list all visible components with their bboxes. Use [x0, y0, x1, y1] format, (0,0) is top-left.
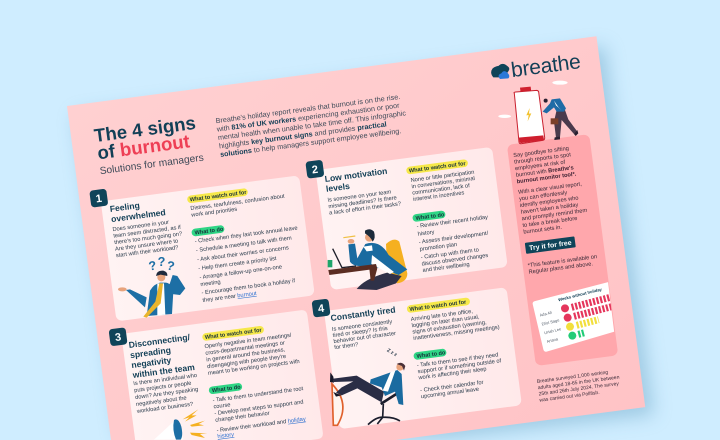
sidebar text: Say goodbye to sifting [513, 146, 569, 159]
question text 3: puts projects or people [134, 381, 192, 394]
question text 1: start with their workload? [116, 245, 179, 259]
chart card [533, 281, 620, 352]
sidebar text: to take a break before [522, 216, 578, 229]
actions 4: - Check their calendar for [420, 380, 484, 394]
actions 2: promotion plan [419, 242, 457, 253]
question text 2: a lack of effort in their tasks? [329, 201, 401, 217]
watch text 1: Distress, tearfulness, confusion about [190, 194, 285, 212]
intro text: Breathe's holiday report reveals that burnout is on the rise. [215, 92, 401, 125]
jacket [370, 370, 403, 405]
pill watch 1: What to watch out for [189, 190, 248, 203]
sidebar text: burnout monitor tool*. [516, 171, 577, 185]
badge 3 [109, 327, 128, 346]
title: Solutions for managers [99, 153, 204, 177]
watch text 3: meant to be working on projects with [208, 359, 300, 377]
watch text 2: interest in incentives [413, 190, 465, 203]
sidebar text: burnout sets in. [523, 225, 563, 236]
actions 3: - Review their workload and holiday [216, 417, 306, 434]
shoes [330, 372, 341, 397]
question text 1: team seem distracted, as if [113, 225, 182, 240]
chair base [368, 404, 400, 425]
question text 2: Is someone on your team [327, 189, 392, 204]
chair [386, 240, 407, 283]
row labels: Uriah Lee [544, 326, 562, 335]
watch text 1: work and priorities [190, 207, 238, 219]
sidebar text: through reports to spot [514, 152, 572, 166]
heading 1: Feeling [109, 200, 140, 214]
actions 1: - Ask about their worries or concerns [197, 245, 289, 263]
actions 2: and their wellbeing [422, 262, 470, 274]
heading 2: levels [325, 181, 351, 194]
chart: weeks without holiday [533, 281, 620, 352]
plant [328, 260, 332, 267]
question text 4: for them? [334, 342, 359, 351]
intro text: with 81% of UK workers experiencing exhaustion or poor [216, 101, 400, 134]
illustration: overwhelmed man [118, 255, 185, 318]
shirt [383, 371, 395, 392]
watch text 4: logging on later than usual, [411, 314, 480, 329]
watch text 4: signs of exhaustion (yawning, [412, 320, 487, 336]
illustration: sleeping man [330, 348, 405, 425]
heading 1: overwhelmed [111, 207, 166, 224]
head [157, 273, 165, 281]
intro text: highlights key burnout signs and provides practical [218, 119, 387, 150]
panel: card 3 disconnecting [109, 304, 324, 440]
shoes [554, 130, 578, 140]
question text 1: Are they unsure where to [115, 238, 179, 253]
panel: card 2 low motivation [305, 137, 508, 291]
pill do 3: What to do [212, 384, 242, 394]
heading 3: within the team [131, 362, 196, 380]
watch text 2: communication, lack of [412, 183, 471, 197]
intro text: solutions to help managers support employee wellbeing. [220, 126, 402, 159]
button: try it for free: Try it for free [529, 240, 572, 252]
zzz: Z z z [386, 348, 398, 358]
trousers [333, 376, 384, 402]
actions 2: - Review their recent holiday [416, 215, 488, 230]
briefcase [551, 118, 558, 124]
heading 4: Constantly tired [330, 305, 396, 323]
heading 3: Disconnecting/ [128, 332, 191, 350]
pill watch 2: What to watch out for [409, 161, 467, 174]
pencil [343, 236, 355, 238]
question text 4: tired or sleepy? Is this [332, 326, 388, 339]
actions 3: change their behavior [215, 411, 270, 424]
watch text 3: Openly negative in team meetings/ [204, 333, 292, 350]
head [396, 363, 404, 371]
laptop [333, 249, 356, 268]
badge 3: 3 [114, 331, 122, 344]
actions 1: they are near burnout [202, 291, 257, 304]
man legs [554, 110, 577, 137]
actions 2: history [417, 230, 435, 238]
sidebar text: With a clear visual report, [518, 181, 583, 196]
left hand [118, 287, 127, 291]
chair seat [381, 391, 402, 404]
legs [357, 273, 402, 290]
jacket [348, 243, 407, 275]
heading 3: spreading [129, 345, 171, 360]
badge 4: 4 [317, 303, 326, 315]
intro text: mental health when unable to take time off. This infographic [217, 108, 407, 142]
row 3 [566, 320, 599, 331]
illustration: man at desk [328, 229, 407, 290]
title: The 4 signs [93, 112, 197, 146]
battery cap [520, 87, 531, 93]
actions 2: discuss observed changes [421, 253, 489, 268]
pill do 3 [208, 383, 243, 395]
actions 4: - Talk to them to see if they need [417, 352, 499, 369]
actions 3: course [213, 402, 231, 410]
watch text 3: disengaging with people they're [207, 354, 287, 370]
actions 1: - Arrange a follow-up one-on-one [199, 264, 282, 281]
head [544, 99, 548, 103]
jacket [126, 275, 185, 316]
jacket [543, 98, 566, 113]
page: pink infographic sheet [67, 36, 645, 440]
actions 4: work is affecting their sleep [417, 367, 487, 382]
watch text 2: None or little participation [410, 170, 475, 184]
question marks: ? [165, 259, 176, 274]
icon: logo cloud [491, 64, 509, 79]
row labels [540, 310, 561, 343]
row labels: Ada Ali [539, 310, 552, 318]
pill do 1: What to do [194, 227, 224, 236]
watch text 4: inattentiveness, missing meetings) [413, 325, 500, 342]
pill watch 4: What to watch out for [409, 299, 467, 313]
question text 3: negatively about the [136, 395, 187, 408]
question marks: ? [158, 255, 165, 269]
battery charge [518, 135, 544, 143]
row 2 [564, 307, 612, 322]
question text 3: Is there an individual who [133, 373, 197, 387]
actions 4: upcoming annual leave [421, 387, 479, 400]
question marks: ? [147, 258, 157, 274]
desk [328, 264, 377, 281]
badge 1 [89, 189, 108, 208]
question marks [147, 255, 176, 274]
row 1 [561, 297, 612, 312]
sidebar text: you can effortlessly [519, 190, 568, 202]
actions 3: - Develop next steps to support and [214, 399, 304, 417]
hair [397, 363, 405, 371]
actions 1: meeting [200, 279, 221, 288]
question text 3: workload or business? [136, 402, 194, 415]
actions 1: - Schedule a meeting to talk with them [196, 236, 292, 254]
watch text 3: in general around the business, [206, 347, 286, 363]
heading 3: negativity [131, 355, 172, 370]
survey footnote: 25th and 26th July 2024. The survey [538, 381, 620, 397]
survey footnote: was carried out via Pollfish. [539, 390, 600, 404]
actions 3: - Talk to them to understand the root [212, 386, 304, 404]
lightning bolt [526, 108, 531, 121]
hair [156, 271, 167, 276]
badge 2: 2 [311, 164, 319, 177]
cloud left [498, 115, 511, 118]
cloud right [552, 81, 568, 85]
sidebar text: and promptly remind them [521, 208, 588, 222]
icon: battery and man [498, 81, 578, 144]
question text 3: down? Are they speaking [135, 387, 199, 401]
bolts [183, 409, 207, 438]
question text 1: there's too much going on? [114, 231, 183, 246]
sidebar text: identify employees who [520, 195, 579, 209]
row labels: Eliot Sage [541, 317, 561, 327]
panel: card 4 constantly tired [312, 275, 522, 431]
actions 3: history [217, 432, 235, 440]
tie [143, 283, 163, 318]
hand [348, 239, 354, 244]
hair [365, 229, 375, 242]
actions 1: - Encourage them to book a holiday if [201, 278, 296, 297]
watch text 4: Arriving late to the office, [410, 309, 474, 323]
pill do 2: What to do [415, 212, 445, 222]
watch text 3: cross-departmental meetings or [205, 340, 285, 357]
panel: sidebar [507, 134, 618, 366]
title: of burnout [96, 130, 191, 163]
question text 2: missing deadlines? Is there [328, 195, 397, 210]
sidebar text: burnout with Breathe's [516, 165, 574, 179]
sidebar text: employees at risk of [515, 160, 566, 172]
actions 2: - Assess their development/ [418, 231, 489, 246]
pill watch 3: What to watch out for [205, 328, 263, 341]
badge 1: 1 [95, 193, 103, 205]
panel: card 1 feeling overwhelmed [89, 163, 315, 323]
illustration: megaphone [154, 409, 207, 440]
row 4 [568, 332, 585, 340]
button: try it for free [525, 236, 576, 254]
actions 4: support or if something outside of [417, 358, 502, 375]
sidebar text: haven't taken a holiday [520, 202, 579, 216]
question text 4: Is someone consistently [332, 319, 393, 333]
head [365, 233, 374, 242]
watch text 2: in conversations, minimal [411, 176, 475, 190]
actions 2: - Catch up with them to [420, 247, 479, 261]
shirt [363, 245, 394, 274]
question text 4: behavior out of character [333, 331, 396, 345]
plan note: Regular plans and above. [528, 261, 594, 276]
plan note: *This feature is available on [527, 254, 598, 269]
clock [332, 384, 343, 425]
actions 1: - Check when they last took annual leave [194, 225, 298, 245]
badge 2 [305, 160, 324, 179]
page shadow [75, 46, 654, 438]
rim [173, 419, 182, 440]
question text 1: Does someone in your [112, 220, 170, 233]
row labels: Ariana [546, 336, 559, 344]
battery body [514, 90, 545, 144]
actions 1: - Help them create a priority list [198, 256, 277, 272]
badge 4 [312, 299, 331, 318]
title [93, 112, 204, 177]
shirt [157, 283, 165, 315]
chart title: Weeks without holiday [558, 286, 603, 302]
survey footnote: Breathe surveyed 1,000 working [537, 370, 609, 385]
pill do 4: What to do [416, 350, 446, 360]
cone [154, 419, 183, 440]
survey footnote: adults aged 18-65 in the UK between [537, 375, 620, 391]
logo wordmark: breathe [510, 50, 582, 82]
heading 2: Low motivation [324, 166, 388, 184]
